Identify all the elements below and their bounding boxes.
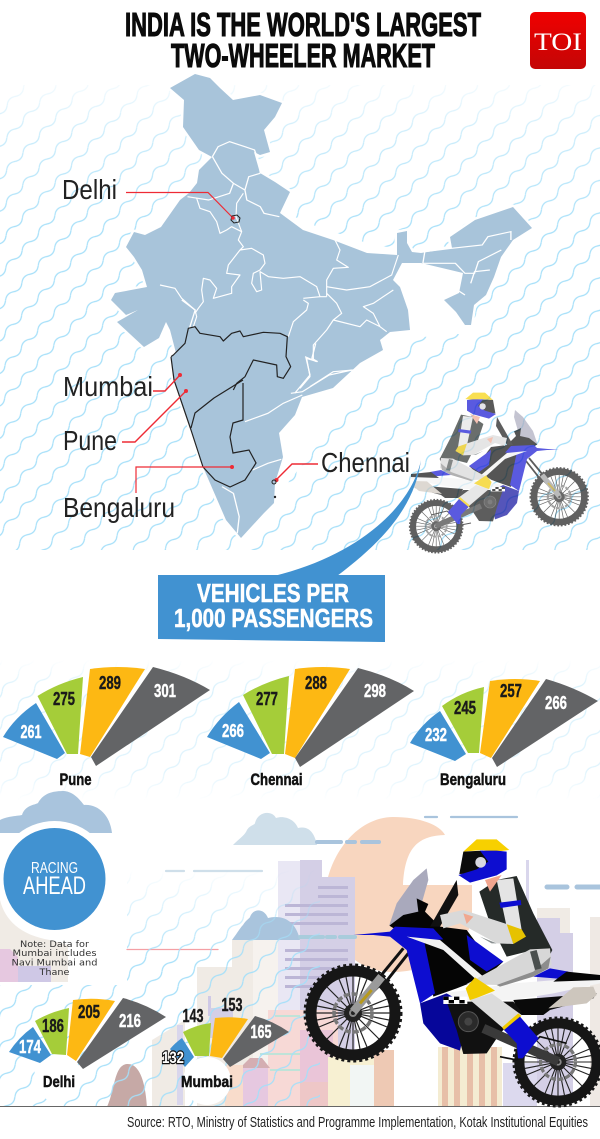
chart: Mumbai: 165 — [250, 1022, 272, 1042]
TOI logo — [530, 12, 586, 69]
cloud: top left — [0, 791, 112, 833]
chart: Chennai: 266 — [222, 721, 244, 741]
label: Delhi — [62, 174, 240, 223]
heading banner: vehicles per 1,000 passengers: 1,000 PASSENGERS — [174, 603, 373, 633]
chart: Pune — [3, 667, 210, 789]
note: Thane — [38, 968, 70, 978]
chart: Delhi: 174 — [19, 1037, 41, 1057]
large motorcycle illustration — [305, 839, 600, 1106]
label: Chennai — [272, 447, 410, 498]
heading banner: vehicles per 1,000 passengers — [158, 460, 421, 642]
chart: Delhi: 205 — [78, 1002, 100, 1022]
lavender and beige right — [537, 908, 570, 1100]
chart: Mumbai: 143 — [182, 1006, 204, 1026]
label: Bengaluru — [63, 465, 234, 523]
heading banner: vehicles per 1,000 passengers: VEHICLES PER — [197, 578, 349, 608]
chart: Bengaluru: 232 — [425, 725, 447, 745]
chart: Delhi: 216 — [119, 1011, 141, 1031]
chart: Pune: 261 — [20, 722, 42, 742]
chart: Pune: 301 — [154, 681, 176, 701]
label: Delhi: Delhi — [62, 174, 117, 205]
chart: Bengaluru — [410, 679, 598, 789]
beige towers — [197, 940, 253, 1107]
left buildings behind circle — [0, 900, 68, 982]
chart: Mumbai — [162, 995, 289, 1105]
racing ahead badge: AHEAD — [23, 872, 86, 900]
note: Navi Mumbai and — [12, 958, 98, 968]
label: Pune: Pune — [63, 425, 117, 456]
note: Mumbai includes — [12, 949, 97, 959]
label: Mumbai: Mumbai — [63, 371, 153, 402]
state borders: far north and north-east — [188, 142, 511, 295]
chart: Pune: 289 — [99, 673, 121, 693]
chart: Bengaluru: 266 — [545, 693, 567, 713]
TOI logo: TOI — [534, 29, 582, 56]
chart: Chennai: 298 — [364, 681, 386, 701]
title: TWO-WHEELER MARKET — [171, 37, 435, 74]
note — [12, 940, 98, 978]
chart: Chennai: Chennai — [250, 770, 302, 789]
chart: Pune: 275 — [53, 689, 75, 709]
Maharashtra outline — [171, 327, 291, 390]
chart: Delhi: 186 — [42, 1016, 64, 1036]
label: Chennai: Chennai — [321, 447, 410, 478]
chart: Delhi — [9, 998, 166, 1102]
coast clearance bands — [264, 217, 470, 513]
wavy background: charts section — [0, 660, 600, 800]
chart: Bengaluru: Bengaluru — [440, 770, 506, 789]
chart: Delhi: Delhi — [43, 1074, 75, 1091]
cloud: lower — [232, 910, 300, 940]
swoosh arrow — [274, 460, 421, 576]
chart: Bengaluru: 245 — [454, 698, 476, 718]
chart: Bengaluru: 257 — [500, 681, 522, 701]
wavy background: lower section — [0, 878, 320, 1106]
small motorcycle illustration — [410, 393, 588, 553]
sky dashes — [127, 817, 600, 950]
racing ahead badge — [0, 821, 112, 937]
chart: Chennai — [207, 667, 414, 789]
label: Bengaluru: Bengaluru — [63, 492, 175, 523]
chart: Mumbai: 132 — [162, 1048, 184, 1067]
note: Note: Data for — [20, 940, 90, 950]
racing ahead badge: RACING — [31, 860, 78, 877]
chart: Mumbai: Mumbai — [181, 1074, 233, 1091]
map of India — [111, 74, 532, 538]
person silhouette — [107, 1064, 147, 1107]
striped building — [438, 1047, 502, 1107]
baseline rule — [0, 1106, 600, 1107]
chart: Chennai: 277 — [256, 689, 278, 709]
Karnataka and west coast outline — [171, 357, 256, 487]
cream buildings — [328, 1057, 374, 1107]
sun — [325, 817, 472, 972]
chart: Chennai: 288 — [305, 673, 327, 693]
mainland shape — [111, 74, 532, 538]
clouds — [0, 791, 317, 940]
city skyline background — [0, 817, 600, 1107]
label: Pune — [63, 389, 188, 456]
pink building group — [268, 1010, 338, 1107]
lavender towers — [278, 861, 300, 1101]
wavy background: map section — [0, 85, 600, 550]
state borders: central — [160, 193, 398, 388]
chart: Pune: Pune — [60, 770, 92, 789]
state borders: south — [182, 300, 352, 533]
cloud: middle — [233, 813, 317, 845]
title — [125, 6, 481, 74]
chart: Mumbai: 153 — [222, 995, 242, 1015]
